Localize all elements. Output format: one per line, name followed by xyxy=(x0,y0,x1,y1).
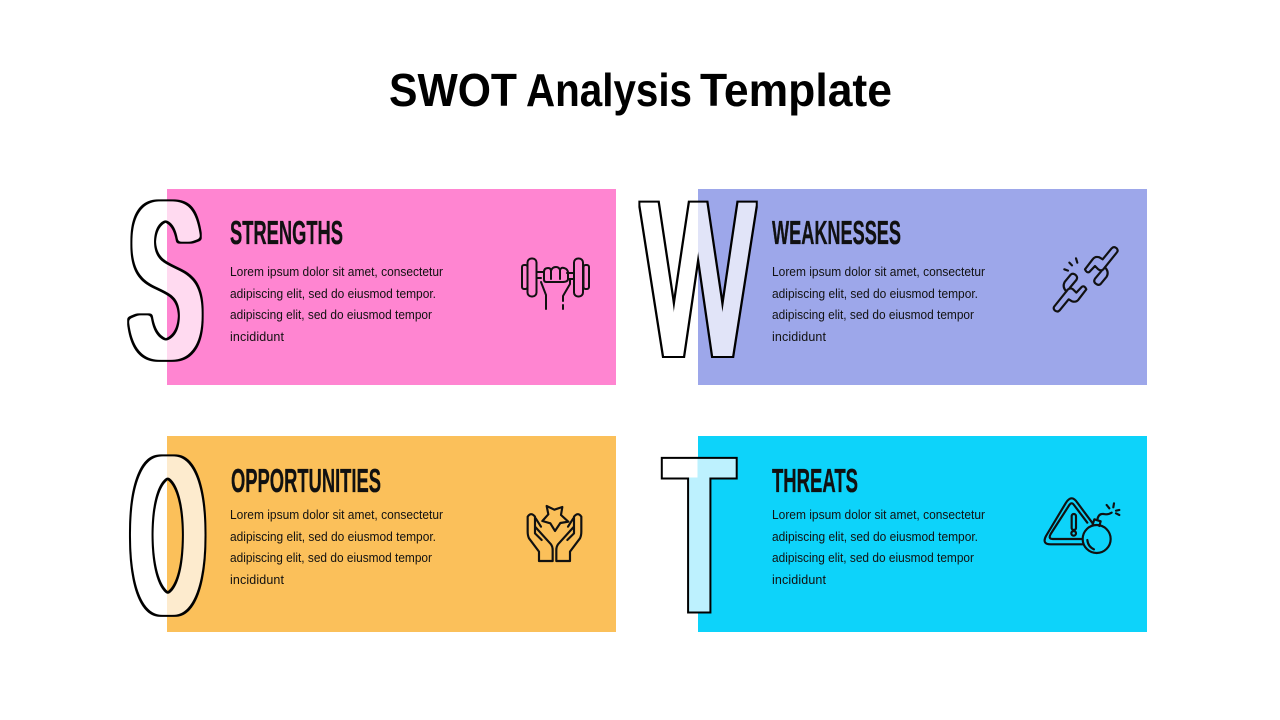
icon: broken chain xyxy=(1054,247,1118,311)
threats background xyxy=(698,436,1147,632)
panel: strengths xyxy=(130,156,616,404)
weaknesses text: adipiscing elit, sed do eiusmod tempor xyxy=(772,308,974,322)
strengths background xyxy=(167,189,616,385)
weaknesses heading: WEAKNESSES xyxy=(772,214,901,251)
icon: warning triangle and bomb xyxy=(1045,498,1119,553)
weaknesses text: incididunt xyxy=(772,330,827,344)
weaknesses text xyxy=(772,265,985,344)
title: SWOT xyxy=(389,64,517,116)
panel: opportunities xyxy=(133,411,616,659)
weaknesses background xyxy=(698,189,1147,385)
strengths text xyxy=(230,265,443,344)
opportunities text: incididunt xyxy=(230,573,285,587)
title: Template xyxy=(700,64,892,116)
opportunities letter O: O xyxy=(133,411,203,659)
threats text: adipiscing elit, sed do eiusmod tempor. xyxy=(772,530,978,544)
strengths text: adipiscing elit, sed do eiusmod tempor xyxy=(230,308,432,322)
title: Analysis xyxy=(526,64,692,116)
strengths heading: STRENGTHS xyxy=(230,214,343,251)
icon: hands holding star xyxy=(528,506,581,561)
opportunities background xyxy=(167,436,616,632)
threats text: Lorem ipsum dolor sit amet, consectetur xyxy=(772,508,985,522)
weaknesses letter W: W xyxy=(643,156,753,402)
threats text: incididunt xyxy=(772,573,827,587)
strengths text: incididunt xyxy=(230,330,285,344)
opportunities text xyxy=(230,508,443,587)
panel: weaknesses xyxy=(643,156,1147,402)
icon: fist with dumbbell xyxy=(522,258,589,309)
threats text: adipiscing elit, sed do eiusmod tempor xyxy=(772,551,974,565)
strengths letter S: S xyxy=(130,156,201,404)
opportunities heading: OPPORTUNITIES xyxy=(231,462,381,499)
opportunities text: adipiscing elit, sed do eiusmod tempor xyxy=(230,551,432,565)
threats text xyxy=(772,508,985,587)
opportunities text: Lorem ipsum dolor sit amet, consectetur xyxy=(230,508,443,522)
strengths text: adipiscing elit, sed do eiusmod tempor. xyxy=(230,287,436,301)
strengths text: Lorem ipsum dolor sit amet, consectetur xyxy=(230,265,443,279)
panel: threats xyxy=(665,413,1147,657)
weaknesses text: adipiscing elit, sed do eiusmod tempor. xyxy=(772,287,978,301)
threats heading: THREATS xyxy=(772,462,858,499)
opportunities text: adipiscing elit, sed do eiusmod tempor. xyxy=(230,530,436,544)
threats letter T: T xyxy=(665,413,733,657)
weaknesses text: Lorem ipsum dolor sit amet, consectetur xyxy=(772,265,985,279)
